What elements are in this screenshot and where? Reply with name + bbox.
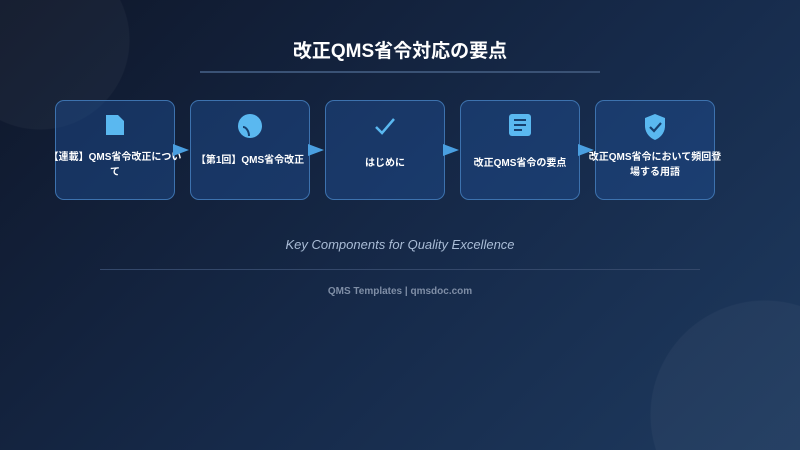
arrow 4 [578,144,594,156]
icon: shield [645,114,665,140]
label: はじめに [365,158,405,169]
box 5 [595,100,715,200]
label: 改正QMS省令において頻回登場する用語 [589,152,721,178]
label: 改正QMS省令の要点 [474,158,566,169]
box 3 [325,100,445,200]
arrow 3 [443,144,459,156]
title: 改正QMS省令対応の要点 [293,41,507,62]
subtitle: Key Components for Quality Excellence [285,237,515,252]
box 4 [460,100,580,200]
arrow 1 [173,144,189,156]
icon: circle [238,114,262,138]
footer: QMS Templates | qmsdoc.com [328,286,472,297]
label: 【連載】QMS省令改正について [49,152,181,178]
box 2 [190,100,310,200]
icon: check [375,118,395,135]
label: 【第1回】QMS省令改正 [196,155,304,166]
box 1 [55,100,175,200]
icon: list [509,114,531,136]
arrow 2 [308,144,324,156]
icon: document [106,115,124,135]
